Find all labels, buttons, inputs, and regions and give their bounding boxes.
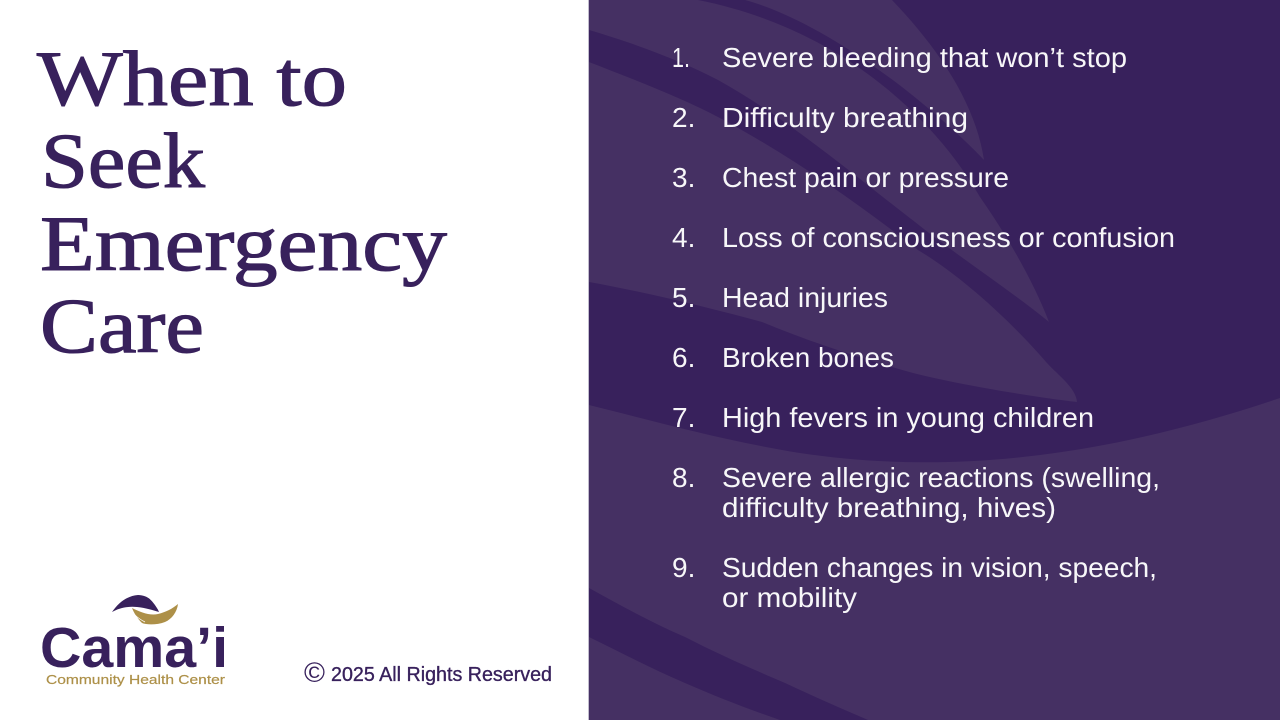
list item 4: 4.: [672, 222, 695, 253]
list item 9: [672, 552, 1157, 613]
list item 8: 8.: [672, 462, 695, 493]
list item 8: [672, 462, 1160, 523]
panel: purple background: [589, 0, 1280, 720]
copyright notice: [304, 657, 552, 688]
title: [37, 35, 447, 369]
list item 8: difficulty breathing, hives): [722, 492, 1056, 523]
list item 8: Severe allergic reactions (swelling,: [722, 462, 1160, 493]
list item 5: Head injuries: [722, 282, 888, 313]
copyright notice: ©: [304, 657, 325, 688]
list item 7: 7.: [672, 402, 695, 433]
logo: Cama'i Community Health Center: [40, 595, 228, 687]
list item 6: Broken bones: [722, 342, 894, 373]
list item 4: Loss of consciousness or confusion: [722, 222, 1175, 253]
list item 2: Difficulty breathing: [722, 102, 968, 133]
list item 3: Chest pain or pressure: [722, 162, 1009, 193]
list item 1: 1.: [672, 42, 690, 73]
icon: logo swoosh: [112, 595, 178, 624]
copyright notice: 2025 All Rights Reserved: [331, 664, 552, 686]
title: When to: [37, 35, 347, 122]
title: Emergency: [40, 200, 447, 287]
title: Care: [40, 282, 204, 369]
logo tagline: Community Health Center: [46, 672, 226, 687]
list item 9: 9.: [672, 552, 695, 583]
logo wordmark: Cama’i: [40, 616, 228, 680]
list item 1: Severe bleeding that won’t stop: [722, 42, 1127, 73]
list item 7: High fevers in young children: [722, 402, 1094, 433]
list item 2: 2.: [672, 102, 695, 133]
list item 9: or mobility: [722, 582, 857, 613]
list item 3: 3.: [672, 162, 695, 193]
list item 5: 5.: [672, 282, 695, 313]
list item 9: Sudden changes in vision, speech,: [722, 552, 1157, 583]
list item 6: 6.: [672, 342, 695, 373]
numbered list of emergency signs: [672, 42, 1175, 613]
title: Seek: [41, 117, 205, 204]
